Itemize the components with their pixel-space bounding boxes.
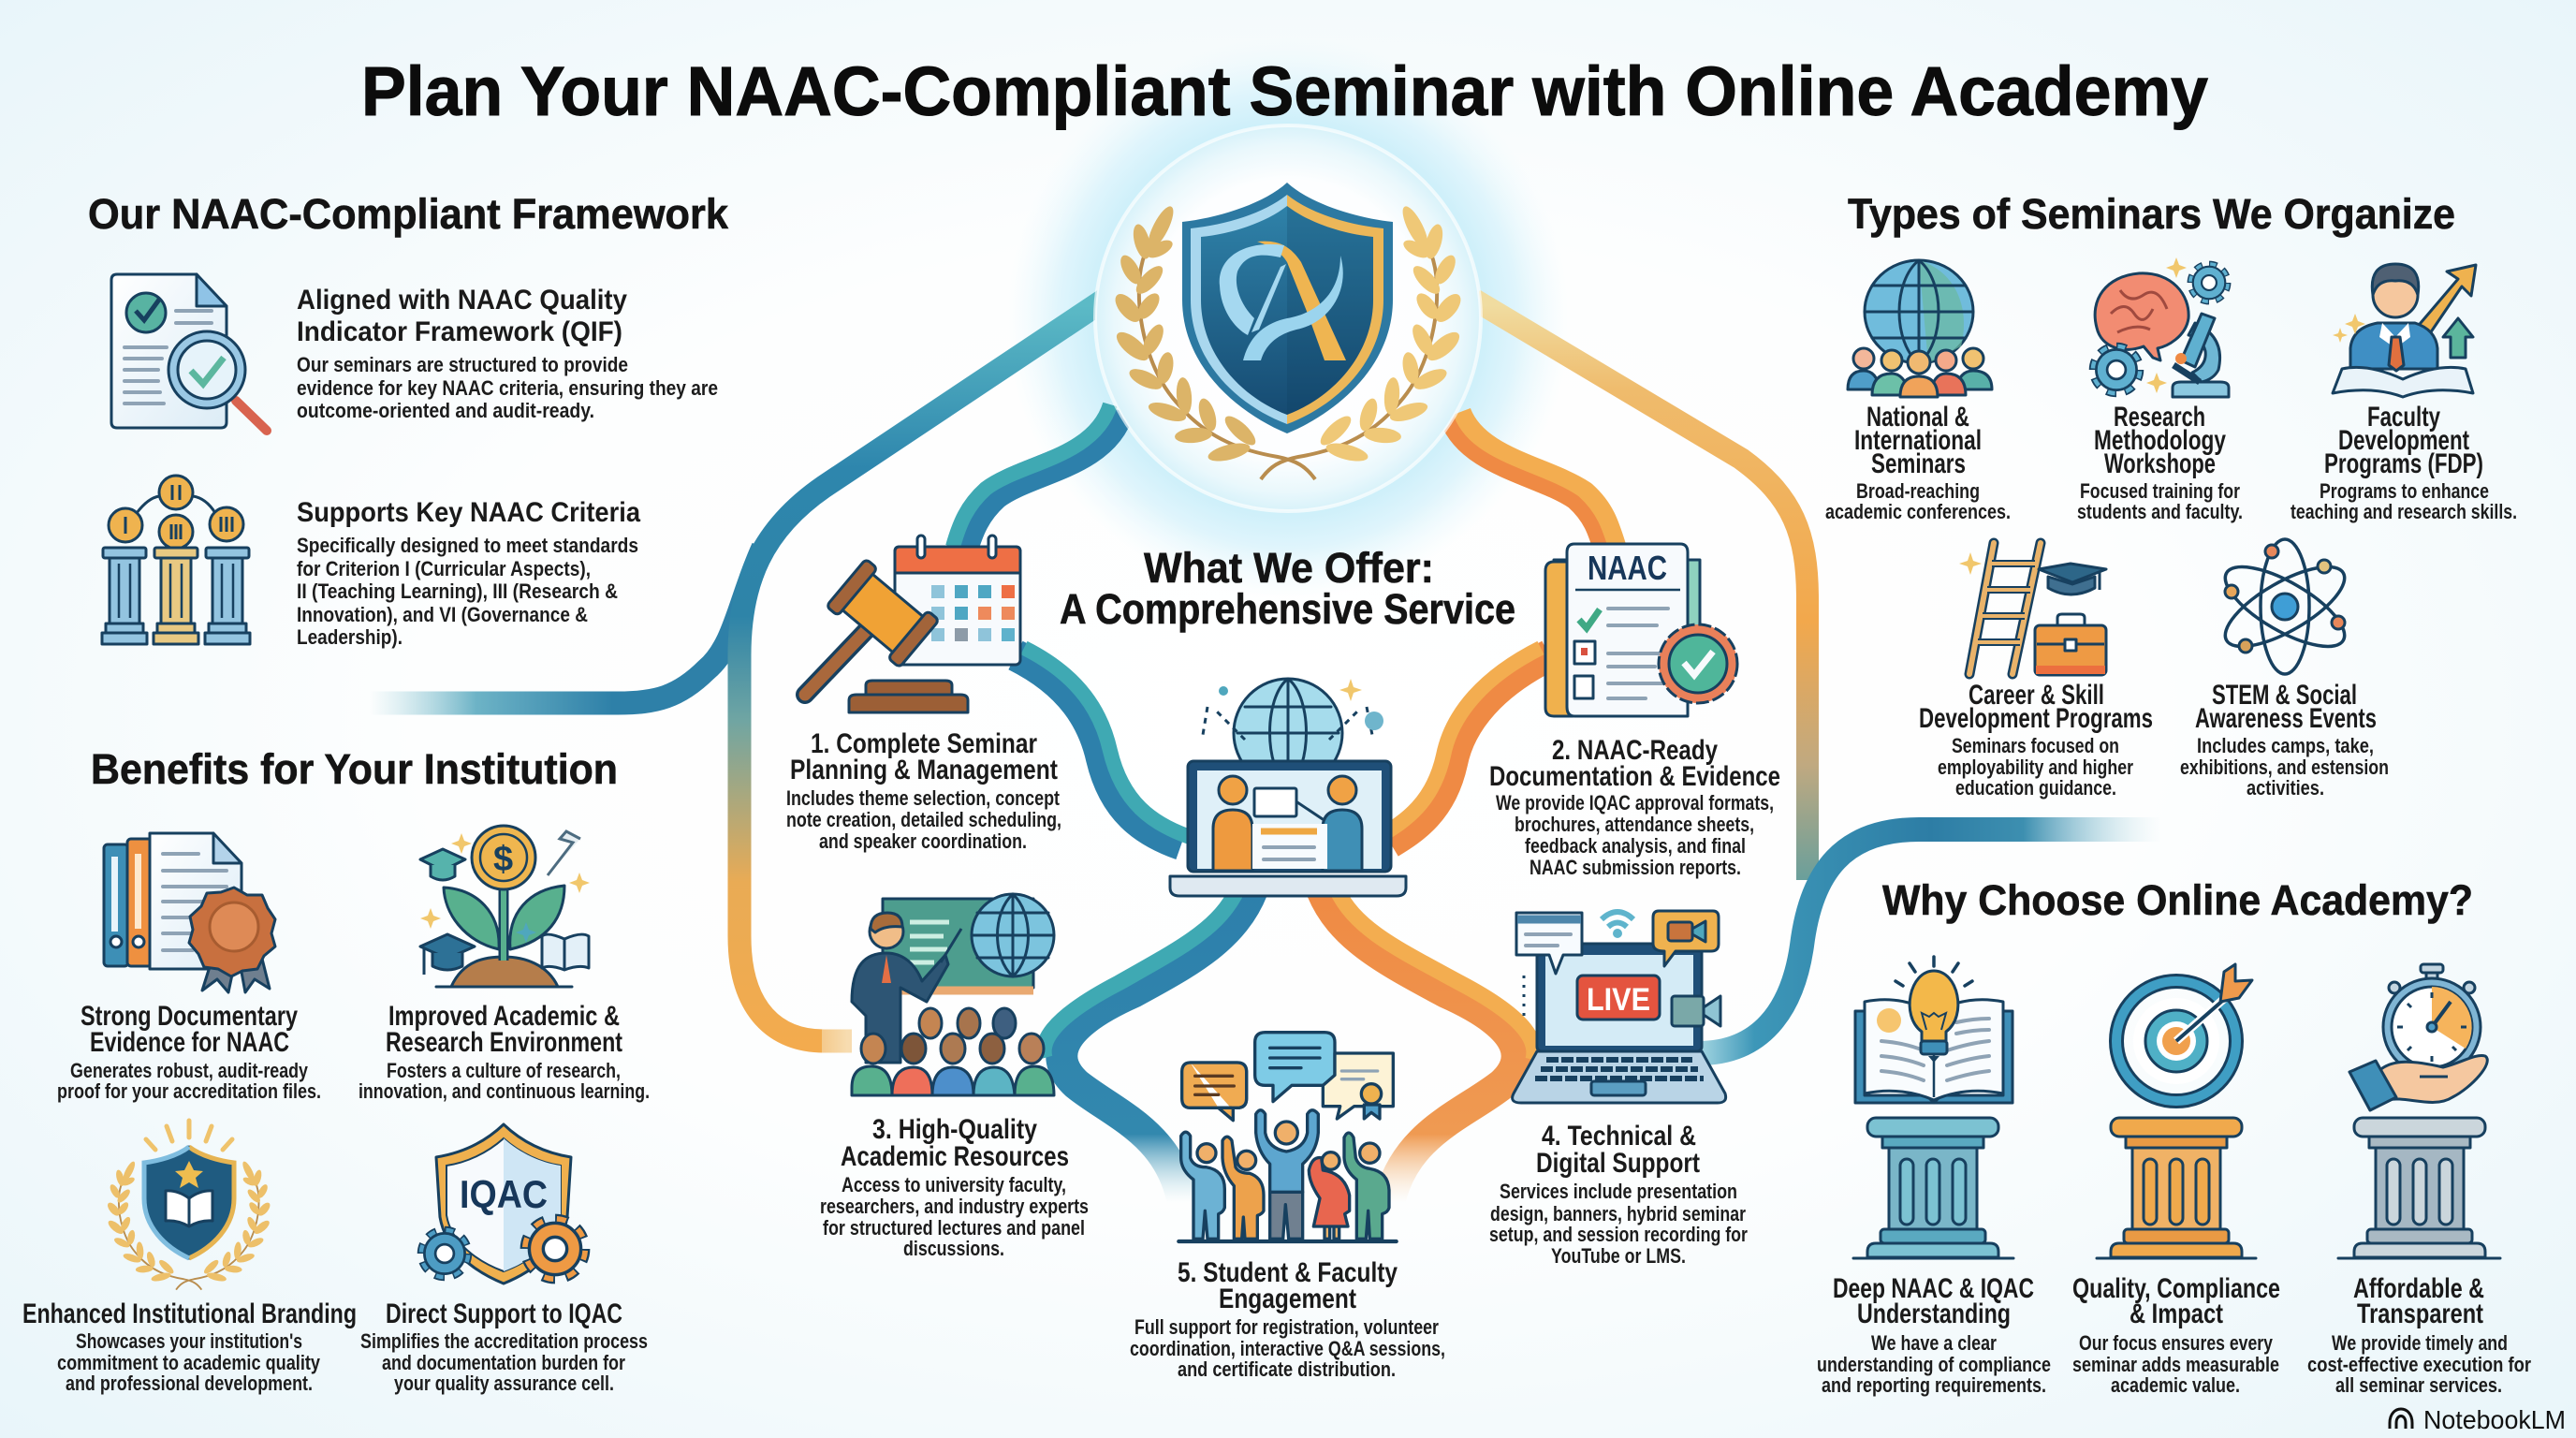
connector ribbons [370,300,2162,1203]
item: branding [22,1121,357,1395]
text: education guidance. [1955,776,2116,800]
text: Quality, Compliance [2072,1273,2280,1304]
text: 5. Student & Faculty [1178,1257,1398,1288]
text: outcome-oriented and audit-ready. [297,399,594,422]
item 4 [1489,911,1748,1268]
text: Improved Academic & [388,1001,620,1032]
item: documentary evidence [57,833,321,1103]
text: and certificate distribution. [1178,1357,1396,1381]
text [2077,402,2243,523]
heading: A Comprehensive Service [1060,585,1515,633]
icon: laurel wreath [1111,203,1465,479]
icon: plant with coin: $ [493,840,513,879]
text: coordination, interactive Q&A sessions, [1130,1337,1445,1360]
text: Evidence for NAAC [90,1027,289,1058]
text: Indicator Framework (QIF) [297,316,622,347]
heading: Types of Seminars We Organize [1848,190,2455,238]
icon: NAAC checklist and seal: NAAC [1588,549,1667,587]
text: Programs (FDP) [2324,448,2483,479]
panel: framework [88,190,729,649]
text: 2. NAAC-Ready [1552,735,1718,766]
text: Enhanced Institutional Branding [22,1299,357,1329]
text [2180,680,2389,800]
text: Our focus ensures every [2079,1331,2274,1355]
text: Fosters a culture of research, [387,1059,621,1082]
panel: what we offer [786,536,1780,1381]
item: STEM [2180,539,2389,800]
icon: IQAC shield and gears [423,1124,583,1284]
text: International [1854,425,1982,456]
text: Programs to enhance [2320,479,2489,503]
text: Supports Key NAAC Criteria [297,497,640,528]
text: academic conferences. [1825,500,2011,523]
icon: target on pillar [2097,964,2256,1258]
text: Strong Documentary [80,1001,298,1032]
text: Services include presentation [1500,1180,1737,1203]
text: Aligned with NAAC Quality [297,285,627,315]
icon: shield [1182,183,1393,433]
heading: Benefits for Your Institution [91,745,618,793]
text: and speaker coordination. [819,829,1027,853]
text: We have a clear [1871,1331,1997,1355]
text: Includes theme selection, concept [786,786,1061,810]
text: students and faculty. [2077,500,2243,523]
text: Seminars [1871,448,1966,479]
text [2291,402,2517,523]
text: Broad-reaching [1856,479,1980,503]
icon: live laptop [1513,911,1726,1103]
item 5 [1130,1033,1445,1381]
watermark: NotebookLM: NotebookLM [2423,1405,2566,1434]
icon: book with bulb on pillar [1853,957,2013,1258]
text: seminar adds measurable [2072,1353,2279,1376]
text: Research [2114,402,2205,433]
text [2072,1273,2280,1397]
text: Methodology [2094,425,2226,456]
icon: globe and people [1848,260,1992,397]
text: Documentation & Evidence [1489,761,1780,792]
text: employability and higher [1938,756,2133,779]
text: your quality assurance cell. [394,1372,614,1395]
text: National & [1866,402,1969,433]
icon: brain gears microscope [2095,257,2229,397]
title: Plan Your NAAC-Compliant Seminar with Online Academy [361,52,2208,130]
text: Showcases your institution's [76,1329,302,1353]
icon: plant with coin [420,826,590,987]
item: IQAC [360,1124,648,1395]
text: Awareness Events [2195,703,2377,734]
text: Research Environment [386,1027,622,1058]
icon: stopwatch in hand on pillar [2338,964,2500,1258]
text [1489,1121,1748,1268]
icon: teacher and audience [852,894,1054,1095]
text: discussions. [903,1237,1004,1260]
text: academic value. [2111,1373,2240,1397]
panel: why choose [1817,876,2531,1397]
text: and reporting requirements. [1822,1373,2046,1397]
text: note creation, detailed scheduling, [786,808,1061,831]
icon: live laptop: LIVE [1587,982,1650,1018]
item: affordable [2307,964,2531,1397]
text: & Impact [2130,1299,2223,1329]
text: Faculty [2367,402,2440,433]
text: brochures, attendance sheets, [1515,813,1754,836]
text: Planning & Management [790,755,1058,785]
item: criteria [102,476,640,649]
icon: IQAC shield and gears: IQAC [460,1172,548,1216]
icon: faculty member and arrow [2333,264,2476,397]
text: and documentation burden for [382,1351,625,1374]
glow ring [1095,125,1481,511]
outer glow [1007,37,1569,599]
icon: NAAC checklist and seal [1545,544,1737,716]
item: research methodology [2077,257,2243,523]
text: 1. Complete Seminar [811,728,1037,759]
text: proof for your accreditation files. [57,1079,321,1103]
text: Seminars focused on [1952,734,2119,757]
text [297,285,718,422]
text: Innovation), and VI (Governance & [297,603,588,626]
item: national and international [1825,260,2011,523]
text: teaching and research skills. [2291,500,2517,523]
text [1825,402,2011,523]
text: researchers, and industry experts [820,1195,1089,1218]
text: Digital Support [1536,1148,1700,1179]
text: Generates robust, audit-ready [70,1059,309,1082]
text: Development [2338,425,2469,456]
item: career [1919,543,2153,800]
icon: pillars and coins [102,476,250,644]
text: Transparent [2357,1299,2483,1329]
item: QIF [111,274,718,431]
text [359,1001,650,1103]
heading: Why Choose Online Academy? [1882,876,2473,924]
text: exhibitions, and estension [2180,756,2389,779]
item: FDP [2291,264,2517,523]
text: NAAC submission reports. [1530,856,1741,879]
text: Development Programs [1919,703,2153,734]
text: activities. [2247,776,2324,800]
heading [1060,544,1515,633]
text [57,1001,321,1103]
icon: laptop with presenters [1170,679,1406,896]
text: setup, and session recording for [1489,1223,1748,1246]
text [297,497,640,649]
icon: shield with book and laurels [106,1121,272,1290]
text: II (Teaching Learning), III (Research & [297,580,618,603]
text: Simplifies the accreditation process [360,1329,648,1353]
item: understanding [1817,957,2051,1397]
text [1489,735,1780,879]
text: Full support for registration, volunteer [1134,1315,1439,1339]
text [786,728,1061,853]
text [1130,1257,1445,1381]
text [820,1114,1089,1260]
item: academic environment [359,826,650,1103]
text: Career & Skill [1969,680,2104,711]
heading: Our NAAC-Compliant Framework [88,190,729,238]
text [2307,1273,2531,1397]
text: commitment to academic quality [57,1351,321,1374]
text: YouTube or LMS. [1551,1244,1686,1268]
text: 3. High-Quality [872,1114,1037,1145]
text: STEM & Social [2212,680,2357,711]
text: for structured lectures and panel [823,1216,1085,1240]
text: Direct Support to IQAC [386,1299,622,1329]
text: Our seminars are structured to provide [297,353,628,376]
text: evidence for key NAAC criteria, ensuring they are [297,376,718,400]
item 3 [820,894,1089,1260]
text: innovation, and continuous learning. [359,1079,650,1103]
text: cost-effective execution for [2307,1353,2531,1376]
text: all seminar services. [2335,1373,2502,1397]
icon: binders and seal [104,833,275,992]
text: Workshope [2104,448,2216,479]
text [360,1299,648,1395]
text: Focused training for [2080,479,2240,503]
central logo [1095,125,1481,511]
text: Affordable & [2353,1273,2484,1304]
text: and professional development. [66,1372,313,1395]
text: Academic Resources [841,1141,1069,1172]
text: feedback analysis, and final [1525,834,1746,858]
text: understanding of compliance [1817,1353,2051,1376]
item 1 [786,536,1061,853]
text: We provide timely and [2332,1331,2508,1355]
text [22,1299,357,1395]
icon: calendar and gavel [805,536,1020,712]
text: Deep NAAC & IQAC [1833,1273,2034,1304]
item 2 [1489,544,1780,879]
panel: benefits [22,745,650,1395]
panel: types of seminars [1825,190,2517,800]
icon: people and speech bubbles [1178,1033,1397,1241]
icon: atom [2215,539,2355,674]
text [1817,1273,2051,1397]
text: design, banners, hybrid seminar [1490,1202,1746,1225]
text: We provide IQAC approval formats, [1496,791,1774,814]
text: Access to university faculty, [842,1173,1066,1196]
heading: What We Offer: [1144,544,1434,592]
text: Understanding [1857,1299,2011,1329]
icon: document with magnifier [111,274,267,431]
text: Engagement [1219,1284,1356,1314]
text: Specifically designed to meet standards [297,534,638,557]
text: Leadership). [297,625,402,649]
text: 4. Technical & [1542,1121,1696,1152]
icon: ladder cap briefcase [1959,543,2106,675]
text: Includes camps, take, [2197,734,2374,757]
item: quality [2072,964,2280,1397]
text [1919,680,2153,800]
text: for Criterion I (Curricular Aspects), [297,557,591,580]
